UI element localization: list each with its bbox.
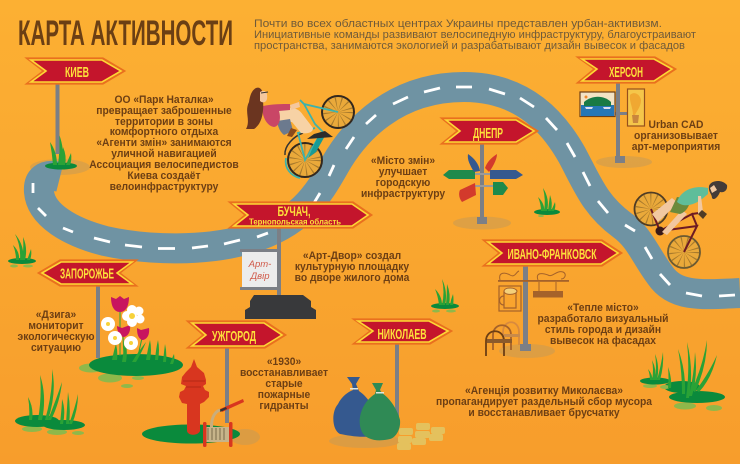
- grass: bottom right: [640, 340, 725, 411]
- text: Бучач: культурную площадку: [295, 261, 409, 273]
- text: Ужгород: восстанавливает: [240, 367, 328, 379]
- poster: cactus: [628, 89, 644, 126]
- text: Ужгород: пожарные: [258, 389, 310, 401]
- sign: Бучач: Тернопольская область: [249, 216, 341, 226]
- grass: Kiev: [45, 134, 77, 170]
- hydrant: [142, 359, 260, 447]
- poster: landscape: [580, 92, 615, 116]
- text: Херсон: Urban CAD: [649, 119, 704, 131]
- grass: center low: [431, 279, 459, 312]
- text: Kiev: [89, 94, 239, 193]
- banner: Арт-Двір: [240, 249, 281, 290]
- sign: Киев: КИЕВ: [65, 64, 89, 81]
- text: Днепр: [361, 155, 445, 200]
- text: Ужгород: «1930»: [267, 356, 301, 368]
- road: [30, 87, 740, 296]
- sign: Николаев: [353, 319, 452, 429]
- text: Запорожье: экологическую: [17, 331, 95, 343]
- banner: Арт-Двір: Двір: [249, 271, 270, 282]
- text: Днепр: «Місто змін»: [371, 155, 435, 167]
- text: Бучач: «Арт-Двор» создал: [303, 250, 401, 262]
- intro text: Инициативные команды развивают велосипедную инфраструктуру, благоустраивают: [254, 29, 696, 41]
- text: Ивано-Франковск: [537, 302, 669, 347]
- sign: Запорожье: ЗАПОРОЖЬЕ: [60, 266, 114, 282]
- text: Днепр: городскую: [376, 177, 430, 189]
- text: Ивано-Франковск: стиль города и дизайн: [545, 324, 661, 336]
- banner: Арт-Двір: Арт-: [248, 259, 271, 270]
- text: Kiev: ОО «Парк Наталка»: [114, 94, 214, 106]
- text: Запорожье: мониторит: [28, 320, 84, 332]
- sign: Ивано-Франковск: [483, 240, 622, 358]
- text: Днепр: инфраструктуру: [361, 188, 445, 200]
- text: Запорожье: ситуацию: [31, 342, 81, 354]
- text: Ужгород: гидранты: [259, 400, 309, 412]
- text: Kiev: Киева создаёт: [127, 170, 201, 182]
- text: Херсон: организовывает: [634, 130, 718, 142]
- text: Запорожье: [17, 309, 95, 354]
- text: Kiev: территории в зоны: [115, 116, 213, 128]
- text: Николаев: и восстанавливает брусчатку: [468, 407, 620, 419]
- text: Николаев: «Агенція розвитку Миколаєва»: [465, 385, 623, 397]
- text: Ивано-Франковск: «Тепле місто»: [567, 302, 639, 314]
- intro text: [254, 18, 696, 52]
- text: Николаев: [436, 385, 653, 419]
- text: Днепр: улучшает: [379, 166, 427, 178]
- text: Ужгород: [240, 356, 328, 412]
- sign: Запорожье: [38, 260, 137, 358]
- trash bags: [333, 377, 400, 440]
- text: Kiev: уличной навигацией: [111, 148, 217, 160]
- text: Бучач: [295, 250, 410, 284]
- grass: bottom left: [15, 369, 85, 435]
- sign: Херсон: [577, 57, 676, 168]
- sign: Николаев: НИКОЛАЕВ: [378, 326, 427, 343]
- sign: Киев: [26, 58, 125, 154]
- text: Херсон: [632, 119, 720, 153]
- text: Kiev: «Агенти змін» занимаются: [96, 137, 232, 149]
- sign: Днепр: [441, 118, 538, 230]
- text: Херсон: арт-мероприятия: [632, 141, 720, 153]
- cyclist: man: [634, 181, 727, 268]
- text: Николаев: пропагандирует раздельный сбор мусора: [436, 396, 653, 408]
- text: Kiev: превращает заброшенные: [96, 105, 232, 117]
- sign: Днепр: ДНЕПР: [473, 125, 503, 142]
- stage: [245, 295, 316, 319]
- intro text: Почти во всех областных центрах Украины представлен урбан-активизм.: [254, 18, 662, 30]
- sign: Бучач: [229, 202, 372, 296]
- text: Запорожье: «Дзига»: [36, 309, 76, 321]
- text: Kiev: комфортного отдыха: [110, 126, 219, 138]
- title: КАРТА АКТИВНОСТИ: [18, 14, 233, 53]
- sign: Херсон: ХЕРСОН: [609, 64, 643, 81]
- grass: left: [8, 234, 36, 268]
- sign: Ужгород: УЖГОРОД: [212, 328, 256, 345]
- text: Ужгород: старые: [265, 378, 303, 390]
- benches: [486, 322, 520, 356]
- shop signs: [498, 271, 569, 311]
- sign: Ужгород: [187, 321, 286, 423]
- text: Бучач: во дворе жилого дома: [295, 272, 410, 284]
- flowers on lawn: [79, 296, 183, 388]
- signpost arrows: [443, 154, 523, 202]
- text: Ивано-Франковск: вывесок на фасадах: [550, 335, 656, 347]
- grass: center: [534, 188, 560, 217]
- sign: Ивано-Франковск: ИВАНО-ФРАНКОВСК: [508, 246, 597, 263]
- cobblestones: [329, 423, 445, 450]
- cyclist: girl: [246, 88, 354, 178]
- text: Kiev: Ассоциация велосипедистов: [89, 159, 239, 171]
- intro text: пространства, занимаются экологией и разрабатывают дизайн вывесок и фасадов: [254, 40, 685, 52]
- text: Ивано-Франковск: разработало визуальный: [537, 313, 669, 325]
- sign: Бучач: БУЧАЧ,: [278, 203, 310, 219]
- text: Kiev: велоинфраструктуру: [110, 181, 218, 193]
